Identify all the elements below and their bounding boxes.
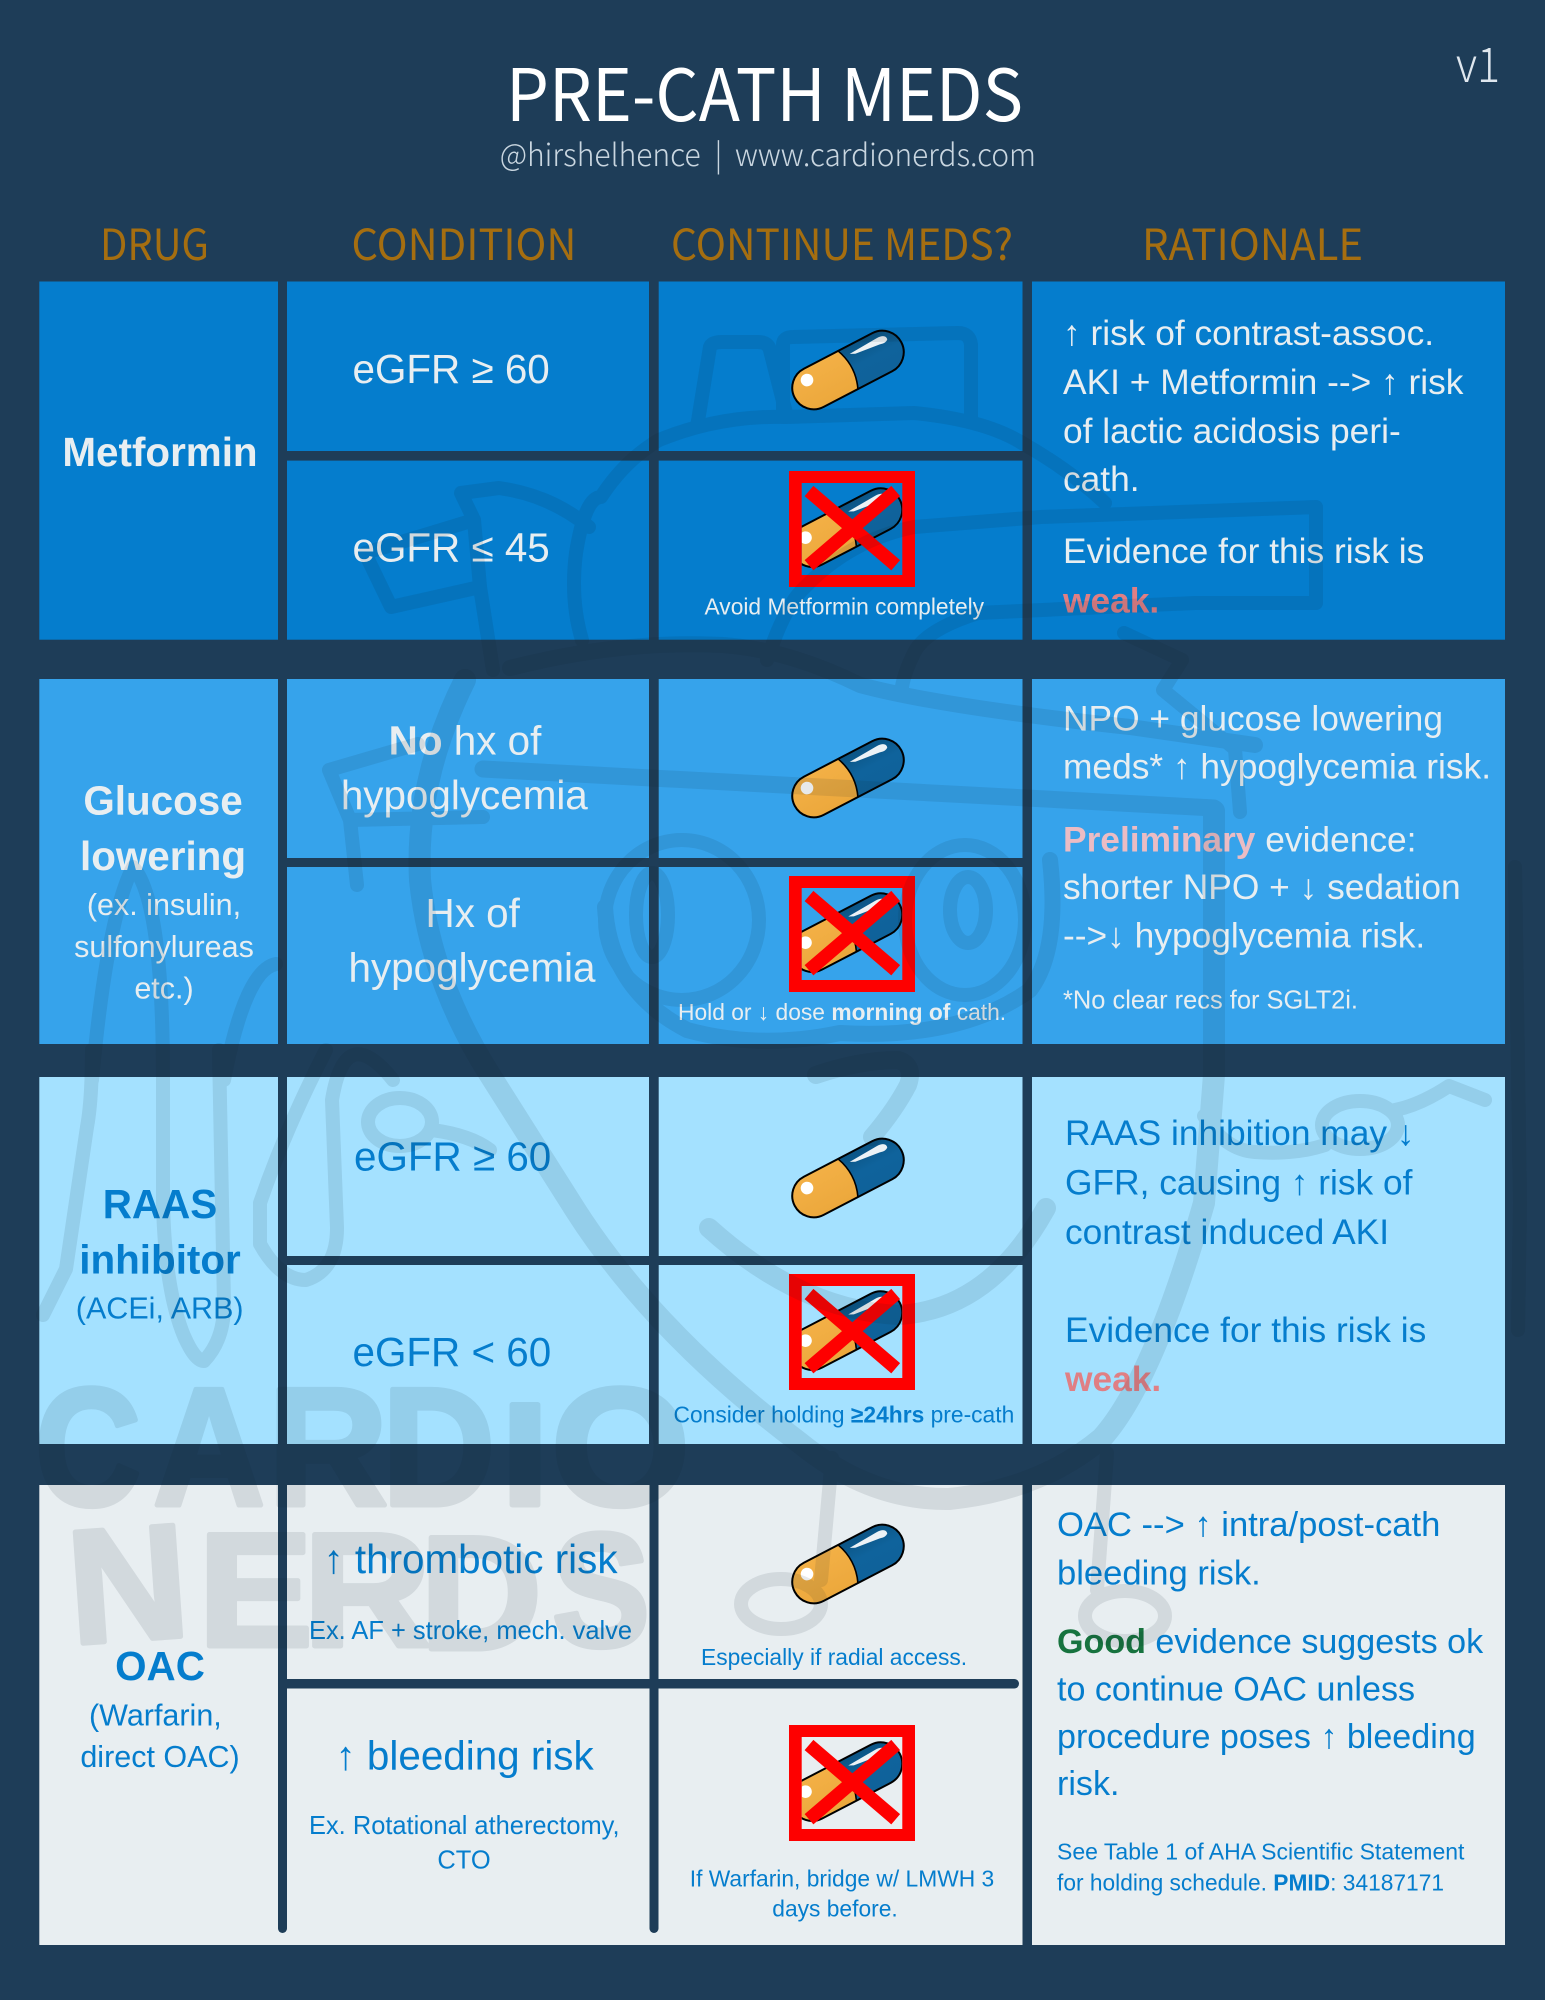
OAC hold cell with crossed pill: days before. bbox=[772, 1896, 898, 1922]
glucose lowering drug cell: lowering bbox=[80, 833, 246, 879]
glucose hold cell with crossed pill: Hold or ↓ dose morning of cath. bbox=[678, 999, 1006, 1025]
metformin condition eGFR at least 60 bbox=[287, 282, 649, 451]
watermark wordmark NERDS: D bbox=[420, 1503, 542, 1684]
subtitle: @hirshelhence bbox=[500, 130, 701, 175]
watermark wordmark NERDS: E bbox=[198, 1500, 313, 1681]
glucose lowering drug cell: etc.) bbox=[134, 972, 194, 1006]
OAC rationale text: Good evidence suggests ok bbox=[1057, 1623, 1484, 1661]
metformin condition eGFR up to 45: eGFR ≤ 45 bbox=[352, 525, 550, 571]
RAAS hold cell with crossed pill bbox=[659, 1265, 1022, 1444]
panel: RAAS inhibitor row bbox=[39, 1077, 1505, 1444]
glucose rationale: NPO + glucose lowering bbox=[1063, 700, 1443, 738]
version label: v1 bbox=[1456, 26, 1500, 96]
column headings: DRUG bbox=[100, 211, 209, 273]
panel: glucose lowering row bbox=[39, 679, 1505, 1044]
OAC rationale text: OAC --> ↑ intra/post-cath bbox=[1057, 1506, 1440, 1544]
OAC rationale background bbox=[1032, 1485, 1505, 1945]
watermark wordmark NERDS: N bbox=[62, 1490, 194, 1679]
OAC drug cell text bbox=[80, 1643, 240, 1774]
metformin condition eGFR at least 60: eGFR ≥ 60 bbox=[352, 346, 550, 392]
RAAS rationale: Evidence for this risk is bbox=[1065, 1311, 1426, 1350]
glucose condition history bbox=[287, 867, 649, 1044]
RAAS drug cell: inhibitor bbox=[79, 1236, 241, 1282]
glucose rationale: Preliminary evidence: bbox=[1063, 820, 1416, 859]
RAAS condition eGFR at least 60 bbox=[287, 1077, 649, 1256]
metformin drug cell: Metformin bbox=[62, 429, 258, 475]
RAAS rationale: contrast induced AKI bbox=[1065, 1213, 1389, 1252]
OAC drug cell text: (Warfarin, bbox=[89, 1698, 222, 1732]
OAC rationale text: procedure poses ↑ bleeding bbox=[1057, 1718, 1476, 1756]
watermark wordmark NERDS bbox=[62, 1490, 650, 1684]
watermark mascot outline bbox=[43, 333, 1520, 1641]
RAAS rationale: weak. bbox=[1064, 1360, 1161, 1399]
watermark wordmark CARDIO bbox=[35, 1353, 690, 1541]
metformin rationale: of lactic acidosis peri- bbox=[1063, 412, 1401, 451]
column headings: CONTINUE MEDS? bbox=[671, 211, 1013, 273]
OAC drug cell text: direct OAC) bbox=[80, 1740, 240, 1774]
grid dividers bbox=[278, 1485, 1019, 1933]
watermark wordmark CARDIO: C bbox=[35, 1353, 141, 1541]
glucose condition no history: No hx of bbox=[389, 718, 542, 764]
subtitle: www.cardionerds.com bbox=[735, 130, 1036, 175]
metformin condition eGFR up to 45 bbox=[287, 461, 649, 640]
OAC rationale text: for holding schedule. PMID: 34187171 bbox=[1057, 1870, 1444, 1896]
RAAS drug cell bbox=[39, 1077, 278, 1444]
RAAS condition eGFR under 60 bbox=[287, 1265, 649, 1444]
OAC continue cell with pill bbox=[701, 1517, 967, 1670]
RAAS hold cell with crossed pill: Consider holding ≥24hrs pre-cath bbox=[674, 1401, 1014, 1427]
OAC condition bleeding risk: CTO bbox=[437, 1846, 491, 1874]
RAAS rationale: RAAS inhibition may ↓ bbox=[1065, 1114, 1415, 1153]
glucose condition no history bbox=[287, 679, 649, 858]
glucose continue cell with pill bbox=[659, 679, 1022, 858]
metformin rationale bbox=[1032, 282, 1505, 640]
glucose rationale: *No clear recs for SGLT2i. bbox=[1063, 987, 1358, 1015]
watermark: CardioNerds mascot and logo bbox=[35, 333, 1520, 1684]
glucose rationale: -->↓ hypoglycemia risk. bbox=[1063, 916, 1425, 956]
OAC table background bbox=[39, 1485, 1023, 1945]
RAAS drug cell: (ACEi, ARB) bbox=[76, 1292, 244, 1326]
metformin rationale: weak. bbox=[1062, 582, 1159, 621]
watermark wordmark NERDS: S bbox=[552, 1500, 650, 1681]
metformin rationale: ↑ risk of contrast-assoc. bbox=[1063, 314, 1434, 353]
OAC drug cell text: OAC bbox=[115, 1643, 205, 1689]
glucose lowering drug cell bbox=[39, 679, 278, 1044]
column headings: CONDITION bbox=[352, 211, 576, 273]
glucose rationale: meds* ↑ hypoglycemia risk. bbox=[1063, 748, 1491, 786]
watermark wordmark CARDIO: I bbox=[501, 1373, 549, 1536]
watermark wordmark CARDIO: R bbox=[268, 1353, 388, 1541]
watermark wordmark CARDIO: O bbox=[551, 1353, 690, 1541]
column headings bbox=[100, 211, 1363, 273]
watermark wordmark CARDIO: D bbox=[382, 1353, 495, 1541]
OAC condition bleeding risk: ↑ bleeding risk bbox=[336, 1732, 594, 1778]
RAAS condition eGFR under 60: eGFR < 60 bbox=[352, 1329, 551, 1375]
OAC condition thrombotic risk: ↑ thrombotic risk bbox=[324, 1536, 618, 1582]
panel: metformin row bbox=[39, 282, 1505, 640]
OAC rationale text: to continue OAC unless bbox=[1057, 1670, 1415, 1708]
OAC rationale text: See Table 1 of AHA Scientific Statement bbox=[1057, 1838, 1465, 1864]
RAAS drug cell: RAAS bbox=[103, 1181, 217, 1227]
OAC rationale text: bleeding risk. bbox=[1057, 1555, 1261, 1593]
subtitle bbox=[500, 130, 1036, 175]
glucose rationale: shorter NPO + ↓ sedation bbox=[1063, 868, 1461, 907]
RAAS rationale: GFR, causing ↑ risk of bbox=[1065, 1163, 1413, 1202]
OAC rationale text: risk. bbox=[1057, 1765, 1119, 1803]
metformin rationale: Evidence for this risk is bbox=[1063, 532, 1424, 571]
RAAS condition eGFR at least 60: eGFR ≥ 60 bbox=[354, 1133, 551, 1179]
watermark wordmark NERDS: R bbox=[303, 1500, 431, 1681]
glucose condition no history: hypoglycemia bbox=[341, 772, 588, 818]
RAAS rationale bbox=[1032, 1077, 1505, 1444]
glucose lowering drug cell: (ex. insulin, bbox=[87, 888, 241, 922]
column headings: RATIONALE bbox=[1142, 211, 1363, 273]
OAC condition bleeding risk: Ex. Rotational atherectomy, bbox=[309, 1812, 620, 1840]
panel: OAC row bbox=[39, 1485, 1505, 1945]
glucose rationale bbox=[1032, 679, 1505, 1044]
metformin continue cell with pill bbox=[659, 282, 1022, 451]
OAC continue cell with pill: Especially if radial access. bbox=[701, 1644, 967, 1670]
metformin drug cell bbox=[39, 282, 278, 640]
subtitle: | bbox=[714, 130, 722, 175]
OAC condition bleeding risk bbox=[309, 1732, 620, 1874]
OAC condition thrombotic risk: Ex. AF + stroke, mech. valve bbox=[309, 1617, 632, 1645]
OAC condition thrombotic risk bbox=[309, 1536, 632, 1645]
title: PRE-CATH MEDS bbox=[506, 37, 1023, 142]
glucose lowering drug cell: sulfonylureas bbox=[74, 930, 254, 964]
watermark wordmark CARDIO: A bbox=[153, 1353, 265, 1541]
glucose lowering drug cell: Glucose bbox=[83, 778, 243, 824]
RAAS continue cell with pill bbox=[659, 1077, 1022, 1256]
glucose condition history: hypoglycemia bbox=[349, 944, 596, 990]
OAC hold cell with crossed pill bbox=[690, 1725, 994, 1922]
OAC rationale text bbox=[1057, 1506, 1484, 1896]
glucose hold cell with crossed pill bbox=[659, 867, 1022, 1044]
glucose condition history: Hx of bbox=[426, 890, 521, 936]
metformin rationale: cath. bbox=[1063, 460, 1140, 499]
metformin hold cell with crossed pill: Avoid Metformin completely bbox=[704, 593, 985, 619]
metformin rationale: AKI + Metformin --> ↑ risk bbox=[1063, 363, 1464, 402]
metformin hold cell with crossed pill bbox=[659, 461, 1022, 640]
OAC hold cell with crossed pill: If Warfarin, bridge w/ LMWH 3 bbox=[690, 1866, 994, 1892]
